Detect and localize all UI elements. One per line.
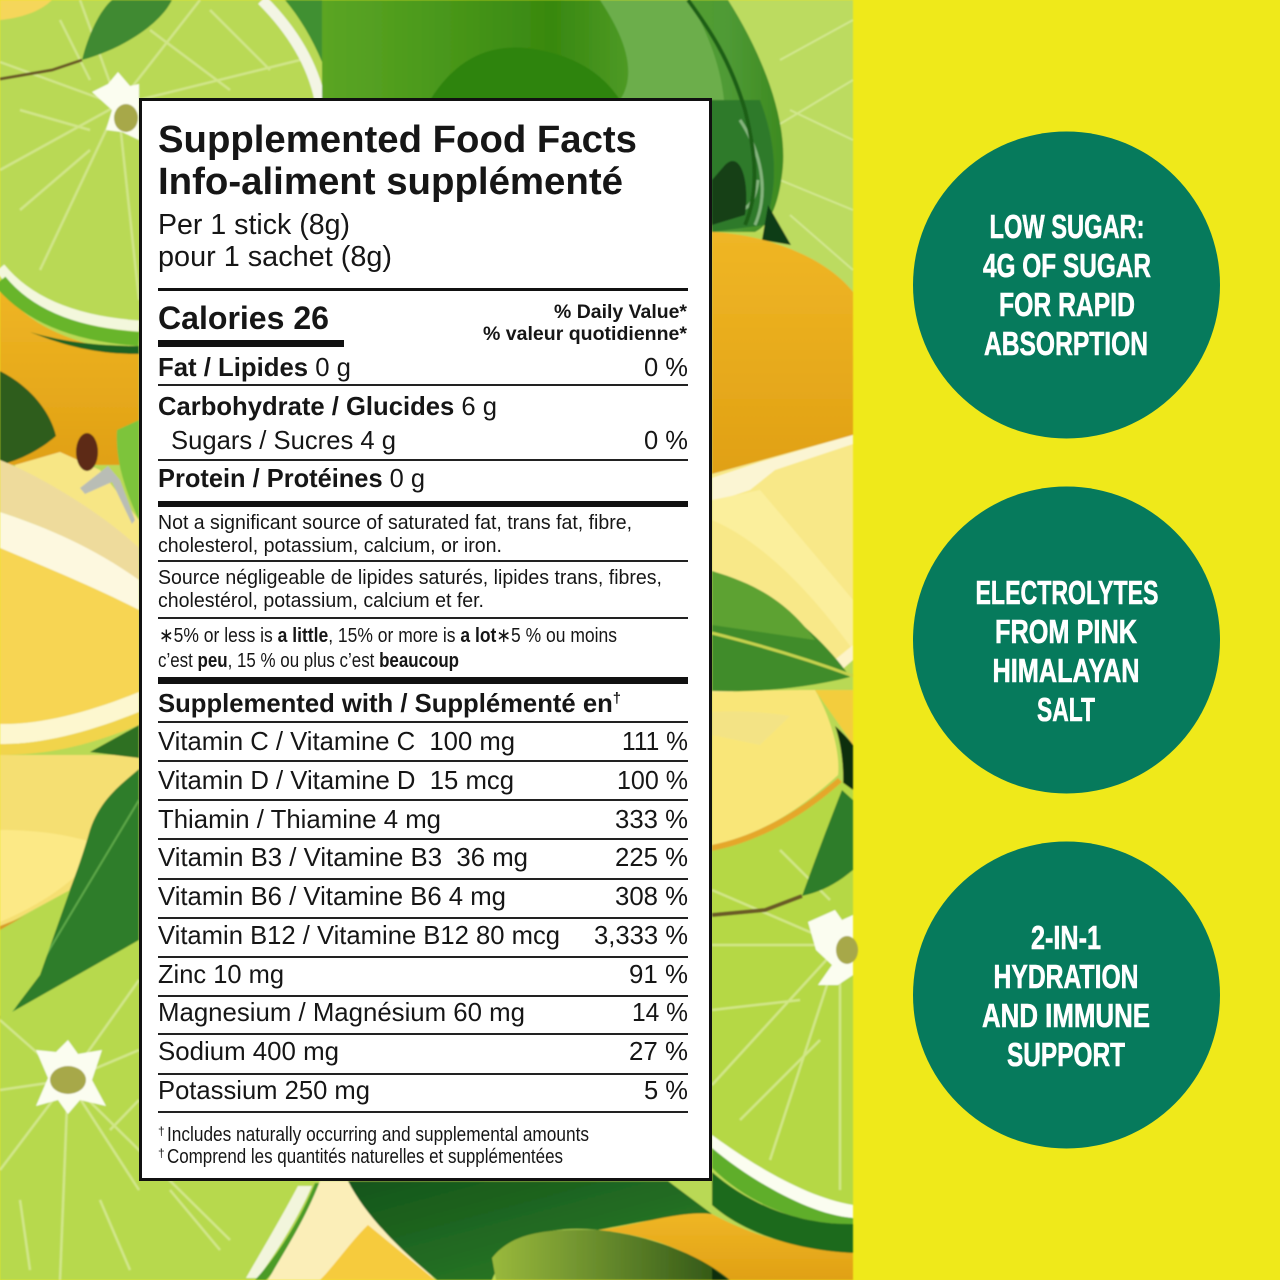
badge: hydration	[913, 842, 1220, 1148]
daily value header: % Daily Value*	[554, 302, 688, 323]
nutrition facts panel	[140, 100, 710, 1180]
footnotes	[158, 1124, 589, 1168]
carbohydrate row: Carbohydrate / Glucides 6 g	[158, 391, 497, 421]
percent guide	[158, 625, 617, 672]
english note	[158, 512, 632, 557]
supplement rows: 225 %	[615, 842, 688, 872]
french note: cholestérol, potassium, calcium et fer.	[158, 590, 484, 612]
orange left	[0, 280, 139, 465]
supplement rows	[158, 726, 688, 1113]
dark lime bottom	[348, 1181, 712, 1280]
pale lemon behind wedge	[15, 452, 139, 560]
dark leaf left	[0, 371, 56, 465]
rind top slice	[262, 0, 320, 100]
serving size	[158, 209, 392, 273]
lime slice bottom left	[0, 890, 322, 1280]
leaf right	[712, 571, 853, 691]
top right slice	[712, 0, 853, 300]
english note: cholesterol, potassium, calcium, or iron.	[158, 535, 502, 557]
badge: electrolytes: FROM PINK	[995, 613, 1137, 650]
olive lime bottom	[492, 1230, 730, 1280]
badge: hydration: 2-IN-1	[1031, 919, 1101, 956]
supplement rows: Vitamin B6 / Vitamine B6 4 mg	[158, 881, 506, 911]
badge: low sugar: 4G OF SUGAR	[983, 247, 1151, 284]
badge: electrolytes: SALT	[1037, 691, 1095, 728]
supplement rows: Vitamin D / Vitamine D 15 mcg	[158, 765, 514, 795]
supplement rows: Sodium 400 mg	[158, 1036, 339, 1066]
supplement rows: 111 %	[622, 726, 688, 756]
leaf and stem top left	[0, 0, 172, 79]
orange bottom	[598, 1213, 853, 1280]
orange right	[712, 232, 853, 474]
supplement rows: 27 %	[629, 1036, 688, 1066]
footnotes: Includes naturally occurring and supplemental amounts	[167, 1124, 589, 1146]
serving size: pour 1 sachet (8g)	[158, 241, 392, 273]
lemon wedge left	[0, 460, 139, 755]
citrus photo background	[0, 0, 858, 1280]
french note	[158, 567, 662, 612]
badge: hydration: SUPPORT	[1007, 1036, 1125, 1073]
supplement rows: 333 %	[615, 804, 688, 834]
title: Info-aliment supplémenté	[158, 161, 623, 203]
leaf lower left	[0, 769, 139, 1018]
footnotes: Comprend les quantités naturelles et supplémentées	[167, 1146, 563, 1168]
supplement rows: Magnesium / Magnésium 60 mg	[158, 997, 525, 1027]
supplement rows: Potassium 250 mg	[158, 1075, 370, 1105]
percent guide: ∗5% or less is a little, 15% or more is a lot∗5 % ou moins	[159, 625, 617, 647]
english note: Not a significant source of saturated fat, trans fat, fibre,	[158, 512, 632, 534]
fat row: Fat / Lipides 0 g	[158, 352, 351, 382]
supplement rows: Vitamin B3 / Vitamine B3 36 mg	[158, 842, 528, 872]
lemon wedge bottom	[268, 1181, 435, 1280]
calories: Calories 26	[158, 300, 329, 336]
lower lemon left	[0, 725, 139, 932]
badge: hydration: HYDRATION	[994, 958, 1138, 995]
footnotes: †	[158, 1146, 165, 1160]
supplement rows: Thiamin / Thiamine 4 mg	[158, 804, 441, 834]
sugars row: Sugars / Sucres 4 g	[171, 425, 396, 455]
supplemented heading: †	[613, 690, 621, 707]
badge: electrolytes: HIMALAYAN	[992, 652, 1140, 689]
daily value header	[483, 302, 688, 345]
french note: Source négligeable de lipides saturés, lipides trans, fibres,	[158, 567, 662, 589]
lemon slice right	[712, 435, 853, 695]
supplement rows: 3,333 %	[594, 920, 688, 950]
lime slice right	[712, 782, 858, 1253]
seed and tool	[76, 420, 139, 524]
supplemented heading: Supplemented with / Supplémenté en	[158, 688, 619, 718]
badge: hydration: AND IMMUNE	[982, 997, 1150, 1034]
serving size: Per 1 stick (8g)	[158, 209, 350, 241]
fat row: 0 %	[644, 352, 688, 382]
supplement rows: 308 %	[615, 881, 688, 911]
badge: electrolytes: ELECTROLYTES	[976, 574, 1158, 611]
badge: low sugar: FOR RAPID	[999, 286, 1135, 323]
title	[158, 119, 637, 203]
supplement rows: Vitamin C / Vitamine C 100 mg	[158, 726, 515, 756]
badge: low sugar: ABSORPTION	[984, 325, 1148, 362]
supplement rows: 5 %	[644, 1075, 688, 1105]
title: Supplemented Food Facts	[158, 119, 637, 161]
supplement rows: 91 %	[629, 959, 688, 989]
supplement rows: Zinc 10 mg	[158, 959, 284, 989]
badge: low sugar: LOW SUGAR:	[990, 208, 1144, 245]
sugars row: 0 %	[644, 425, 688, 455]
percent guide: c’est peu, 15 % ou plus c’est beaucoup	[158, 650, 459, 672]
badge: electrolytes	[913, 486, 1220, 794]
fat row	[158, 352, 688, 382]
supplement rows: 100 %	[617, 765, 688, 795]
daily value header: % valeur quotidienne*	[483, 324, 688, 345]
supplement rows: Vitamin B12 / Vitamine B12 80 mcg	[158, 920, 560, 950]
badge: low sugar	[913, 132, 1220, 438]
dark lime top	[322, 0, 791, 245]
supplement rows: 14 %	[632, 997, 688, 1027]
lime slice top left	[0, 0, 322, 354]
footnotes: †	[158, 1124, 165, 1138]
sugars row	[171, 425, 688, 455]
lemon slice right lower	[712, 690, 853, 851]
protein row: Protein / Protéines 0 g	[158, 463, 425, 493]
